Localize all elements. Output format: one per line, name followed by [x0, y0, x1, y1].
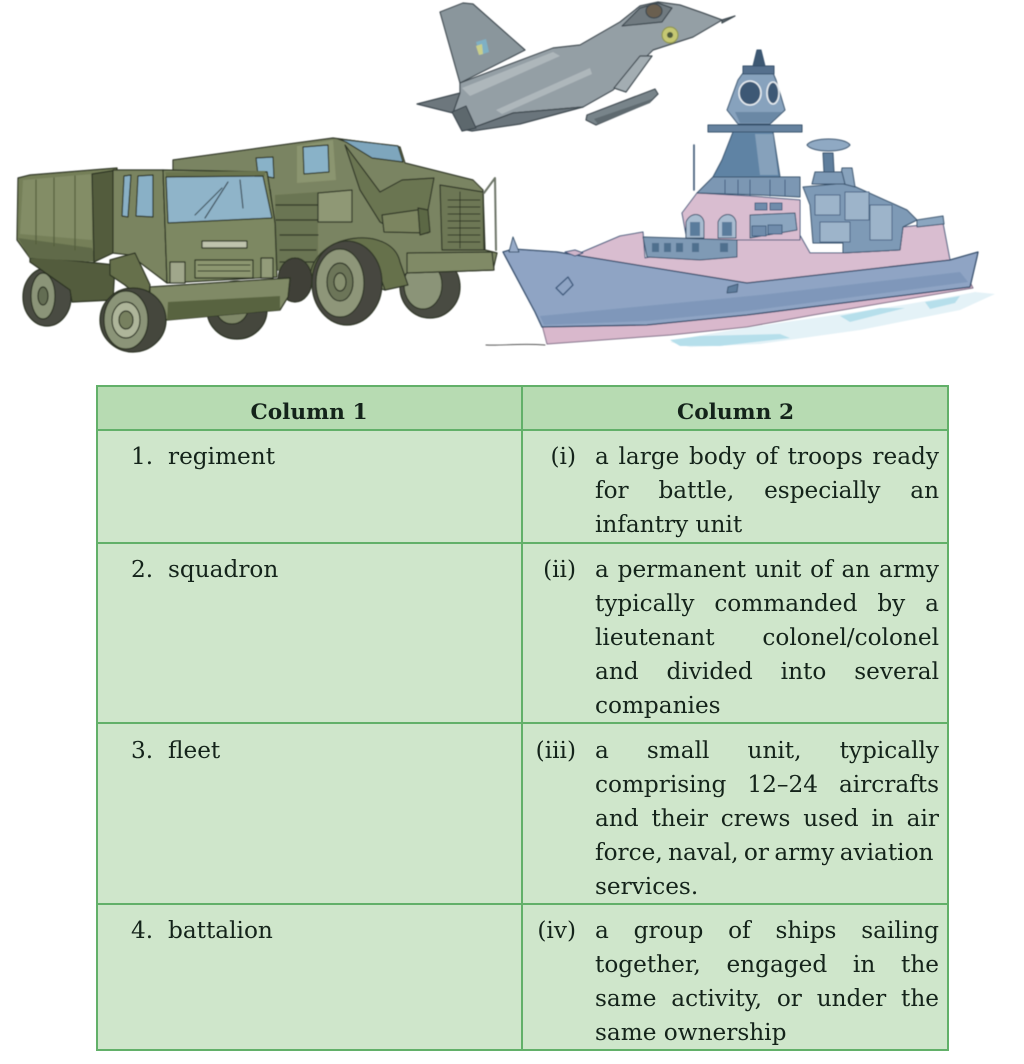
row 2: squadron: and divided into several	[595, 658, 939, 685]
row 3: fleet: comprising 12–24 aircrafts	[595, 771, 939, 798]
illustration: military vehicles, jet and warship	[16, 0, 994, 354]
icon: covered army truck front	[17, 168, 290, 352]
row 4: battalion	[131, 917, 939, 1046]
table: Column 1 and Column 2 matching	[96, 385, 949, 1051]
row 3: fleet: services.	[595, 873, 698, 900]
row 1: regiment: a large body of troops ready	[595, 443, 939, 470]
row 2: squadron: squadron	[168, 556, 278, 583]
row 3: fleet: 3.	[131, 737, 153, 764]
heading: Column 1: Column 1	[250, 400, 368, 425]
row 1: regiment: regiment	[168, 443, 275, 470]
row 4: battalion: same ownership	[595, 1019, 786, 1046]
row 2: squadron: 2.	[131, 556, 153, 583]
row 2: squadron: lieutenant colonel/colonel	[595, 624, 939, 651]
row 2: squadron: (ii)	[543, 556, 576, 583]
row 4: battalion: together, engaged in the	[595, 951, 939, 978]
row 4: battalion: a group of ships sailing	[595, 917, 939, 944]
row 1: regiment: infantry unit	[595, 511, 742, 538]
row 4: battalion: battalion	[168, 917, 273, 944]
row 2: squadron: a permanent unit of an army	[595, 556, 939, 583]
row 3: fleet: a small unit, typically	[595, 737, 939, 764]
icon: navy warship	[486, 50, 995, 347]
row 3: fleet: (iii)	[536, 737, 576, 764]
icon: armoured truck rear	[173, 138, 497, 325]
icon: fighter jet	[417, 2, 735, 131]
row 2: squadron: companies	[595, 692, 721, 719]
row 4: battalion: same activity, or under the	[595, 985, 939, 1012]
row 1: regiment: for battle, especially an	[595, 477, 939, 504]
heading: Column 2: Column 2	[677, 400, 794, 425]
row 3: fleet	[131, 737, 939, 900]
row 2: squadron	[131, 556, 939, 719]
row 3: fleet: and their crews used in air	[595, 805, 939, 832]
row 1: regiment: (i)	[550, 443, 576, 470]
row 4: battalion: 4.	[131, 917, 153, 944]
row 1: regiment: 1.	[131, 443, 153, 470]
header row	[96, 385, 949, 430]
row 1: regiment	[131, 443, 939, 538]
row 4: battalion: (iv)	[537, 917, 576, 944]
row 3: fleet: force, naval, or army aviation	[595, 839, 934, 866]
row 3: fleet: fleet	[168, 737, 220, 764]
row 2: squadron: typically commanded by a	[595, 590, 939, 617]
